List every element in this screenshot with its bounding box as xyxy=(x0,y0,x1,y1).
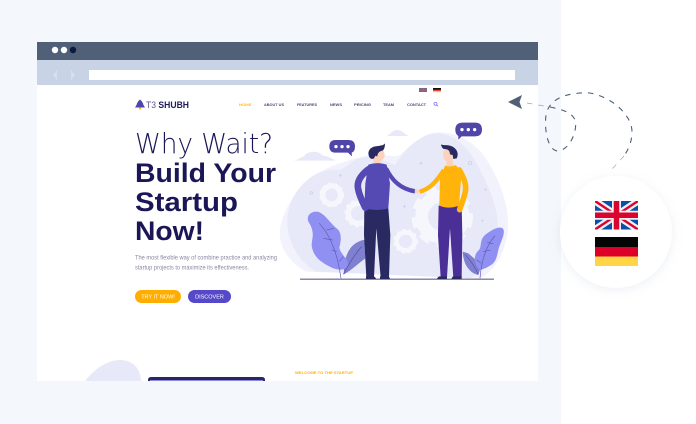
icon: rocket xyxy=(135,100,145,108)
navigation menu: NEWS xyxy=(330,102,342,107)
browser window xyxy=(37,42,538,381)
browser toolbar xyxy=(37,60,538,85)
small language flags xyxy=(419,88,441,92)
sparkles xyxy=(310,161,487,222)
gears xyxy=(321,184,470,252)
hair xyxy=(441,144,458,159)
logo text: T3 SHUBH xyxy=(146,100,189,110)
left back plant xyxy=(343,240,365,274)
navigation menu: PRICING xyxy=(354,102,371,107)
clouds xyxy=(293,130,409,161)
navigation menu: FEATURES xyxy=(297,102,317,107)
navigation menu: CONTACT xyxy=(407,102,427,107)
page content area xyxy=(37,85,538,381)
neck and face xyxy=(373,150,385,164)
browser title bar xyxy=(37,42,538,60)
hero description: The most flexible way of combine practice and analyzing xyxy=(135,254,277,262)
left man xyxy=(358,143,420,279)
handshake xyxy=(415,189,420,193)
hero heading: Now! xyxy=(135,216,204,246)
language card xyxy=(560,201,672,290)
hero description: startup projects to maximize its effectiveness. xyxy=(135,264,249,272)
background blobs xyxy=(280,132,508,278)
neck and face xyxy=(443,147,455,167)
navigation menu: TEAM xyxy=(383,102,395,107)
hair xyxy=(368,143,385,159)
dashed flight path xyxy=(527,93,632,169)
speech bubble left xyxy=(329,140,355,156)
right front plant xyxy=(475,228,504,278)
button: discover xyxy=(188,290,231,303)
flag: United Kingdom xyxy=(595,201,638,230)
navigation menu: ABOUT US xyxy=(264,102,284,107)
icon: search xyxy=(434,102,438,106)
jumper xyxy=(420,165,466,210)
ground line xyxy=(300,278,494,281)
legs xyxy=(438,206,462,277)
lower section laptop edge xyxy=(148,377,265,381)
hero description xyxy=(135,254,277,272)
logo xyxy=(135,100,189,110)
left front plant xyxy=(308,212,348,278)
right back plant xyxy=(463,252,482,275)
navigation menu: HOME xyxy=(239,102,252,107)
button: try it now: TRY IT NOW! xyxy=(141,294,175,300)
jumper xyxy=(358,163,415,210)
navigation menu xyxy=(239,102,427,107)
button: discover: DISCOVER xyxy=(195,294,224,300)
hero heading: Why Wait? xyxy=(135,127,273,160)
shoes xyxy=(437,276,462,279)
button: try it now xyxy=(135,290,181,303)
lower section blob xyxy=(85,360,141,381)
icon: paper plane arrow xyxy=(508,95,522,109)
flag: Germany xyxy=(595,237,638,266)
legs xyxy=(364,208,390,277)
lower section label: WELCOME TO THE STARTUP xyxy=(295,370,353,375)
shoes xyxy=(366,276,390,279)
hero heading: Build Your xyxy=(135,158,277,188)
right man xyxy=(420,144,466,279)
illustration: handshake xyxy=(280,123,508,280)
speech bubble right xyxy=(455,123,482,140)
hero heading: Startup xyxy=(135,187,238,217)
hero heading xyxy=(135,127,277,246)
